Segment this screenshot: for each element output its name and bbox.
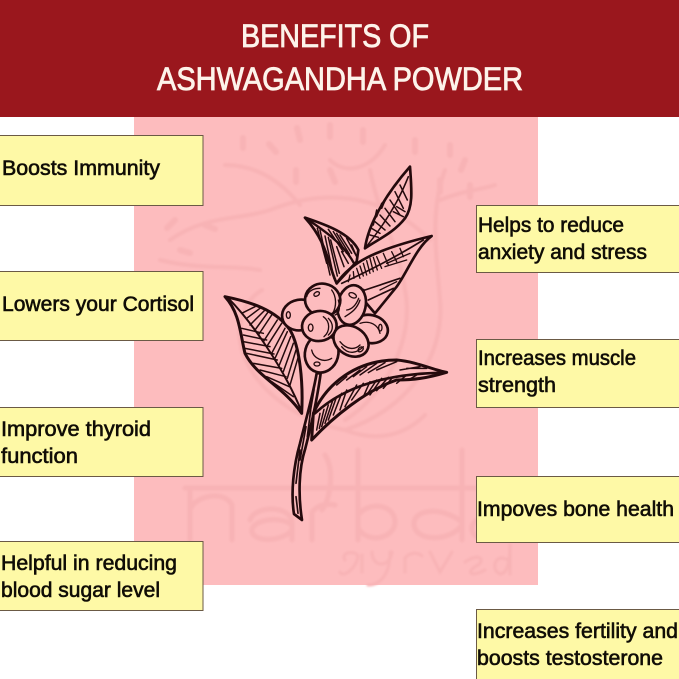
leaf: top: [365, 167, 411, 248]
box: Improve thyroid function: Improve thyroid: [1, 418, 151, 441]
box: Increases muscle strength: Increases muscle: [478, 347, 636, 370]
leaf: middle left: [305, 218, 358, 283]
box: Lowers your Cortisol: [0, 272, 203, 340]
box: Boosts Immunity: [0, 136, 203, 206]
box: Helps to reduce anxiety and stress: [476, 206, 679, 272]
berries: [280, 281, 391, 376]
box: Increases fertility and boosts testosterone: boosts testosterone: [477, 647, 663, 670]
box: Helps to reduce anxiety and stress: anxiety and stress: [478, 241, 647, 264]
header band: [0, 0, 679, 117]
box: Helps to reduce anxiety and stress: Helps to reduce: [478, 214, 624, 237]
leaf: lower right: [312, 360, 447, 440]
box: Helpful in reducing blood sugar level: Helpful in reducing: [1, 552, 177, 575]
box: Lowers your Cortisol: Lowers your Cortisol: [2, 293, 194, 316]
box: Impoves bone health: [476, 476, 679, 542]
leaf: upper right: [337, 236, 432, 313]
leaf: left: [225, 297, 302, 413]
panel: pink background: [134, 117, 538, 585]
illustration: ashwagandha sprig: [225, 167, 447, 520]
berry details: [286, 288, 382, 366]
box: Boosts Immunity: Boosts Immunity: [2, 157, 161, 180]
title: BENEFITS OF: [241, 18, 429, 54]
title: ASHWAGANDHA POWDER: [157, 61, 523, 97]
box: Increases muscle strength: [476, 340, 679, 408]
box: Increases fertility and boosts testosterone: [476, 610, 679, 679]
box: Helpful in reducing blood sugar level: blood sugar level: [1, 579, 160, 602]
box: Increases fertility and boosts testosterone: Increases fertility and: [477, 620, 678, 643]
stem: [293, 373, 321, 520]
box: Increases muscle strength: strength: [478, 374, 556, 397]
box: Improve thyroid function: function: [1, 445, 78, 468]
box: Improve thyroid function: [0, 408, 203, 476]
box: Impoves bone health: Impoves bone health: [477, 498, 674, 521]
title: [157, 18, 523, 97]
watermark: tree and brand name: [160, 125, 530, 585]
box: Helpful in reducing blood sugar level: [0, 542, 203, 610]
